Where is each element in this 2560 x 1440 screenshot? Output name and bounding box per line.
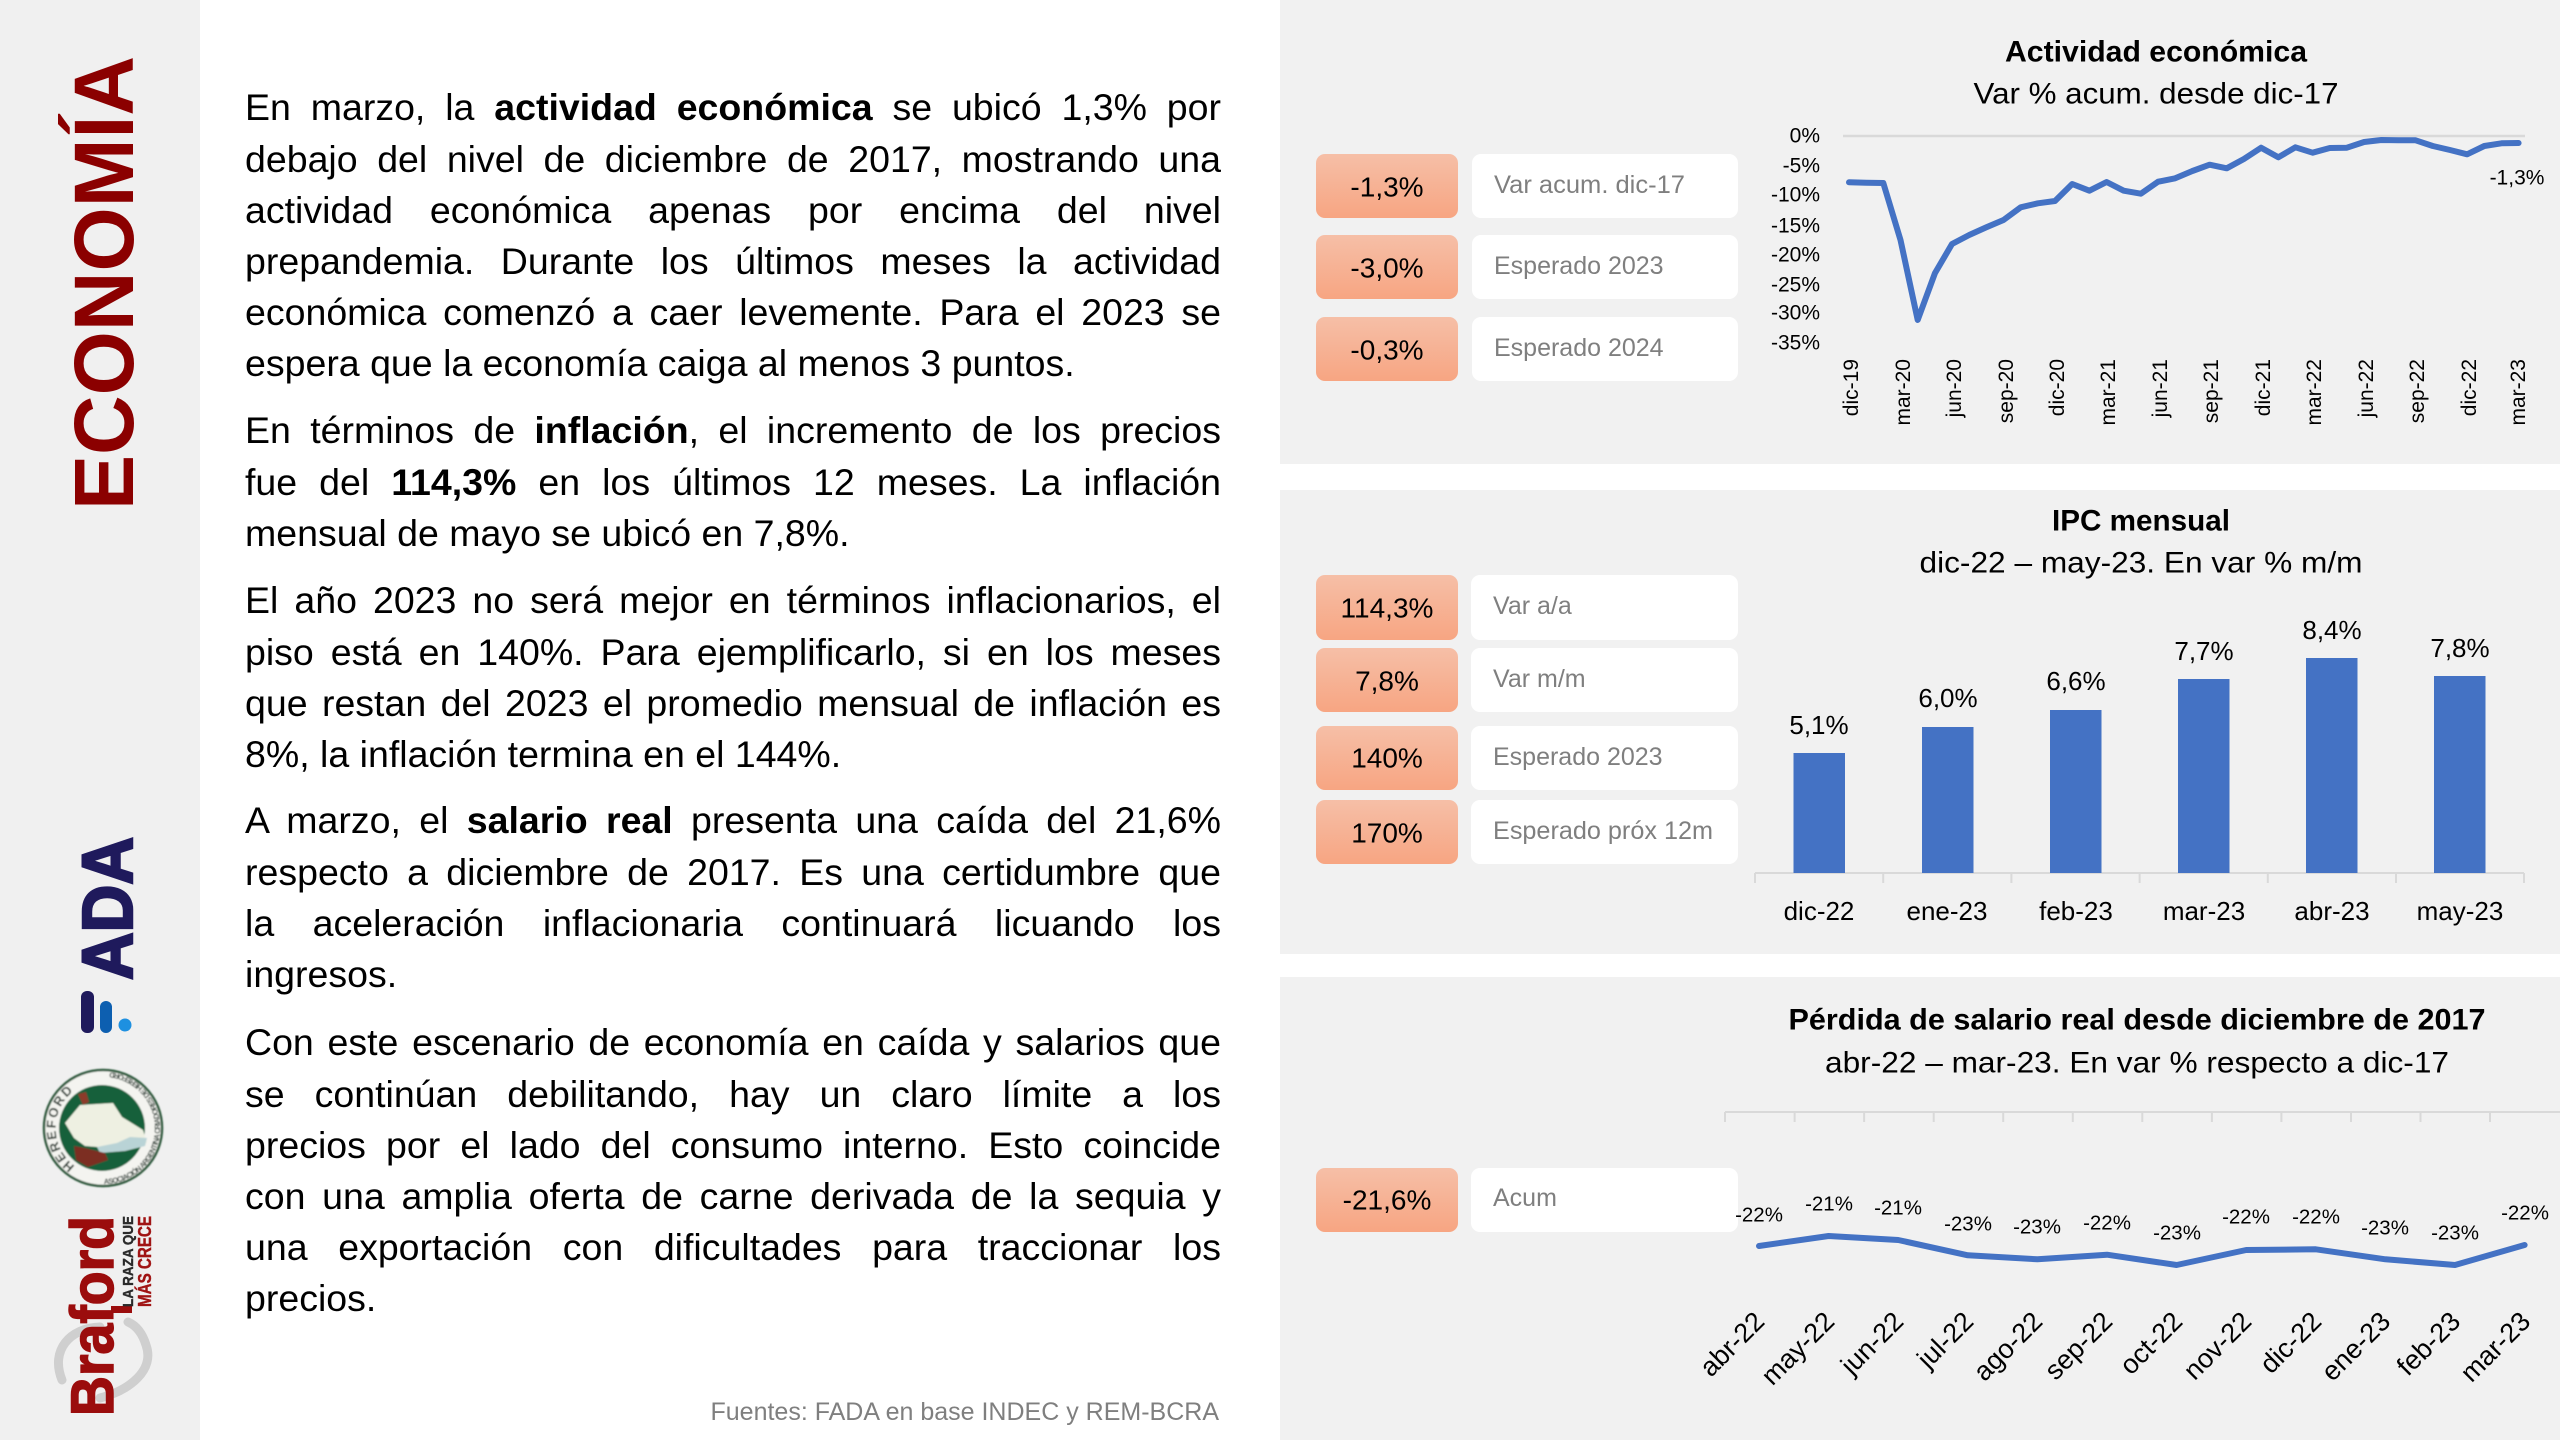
stat: -21,6% acum: Acum [1493, 1184, 1557, 1212]
line chart: actividad económica: 0% [1790, 124, 1820, 148]
line chart: salario real: ago-22 [1968, 1306, 2048, 1387]
stat: 114,3% var a/a: 114,3% [1341, 592, 1433, 624]
logo: Hereford seal: ASOCIACIÓN ARGENTINA CRIADORES DE HEREFORD [104, 1071, 162, 1185]
line chart: actividad económica: mar-22 [2303, 359, 2326, 426]
line chart: actividad económica [1771, 124, 2544, 426]
text block: actividad económica: En marzo, la actividad económica se ubicó 1,3% por [245, 86, 1221, 128]
logo: Braford: Braford [59, 1216, 126, 1416]
line chart: salario real: jun-22 [1834, 1306, 1909, 1381]
text block: inflación [245, 409, 1221, 554]
line chart: actividad económica: jun-20 [1943, 359, 1966, 418]
line chart: salario real: oct-22 [2114, 1306, 2188, 1380]
line chart: salario real: -22% [1735, 1204, 1783, 1226]
stat: 140% esperado 2023: Esperado 2023 [1493, 743, 1663, 771]
line chart: salario real: may-22 [1755, 1306, 1840, 1391]
text block: escenario: precios. [245, 1277, 376, 1319]
line chart: salario real: nov-22 [2178, 1306, 2257, 1386]
stat: 114,3% var a/a [1316, 575, 1738, 640]
line chart: salario real [1694, 1112, 2560, 1391]
bar chart: IPC mensual: ene-23 [1907, 896, 1987, 926]
logo: Hereford seal: HEREFORD [46, 1086, 75, 1173]
heading: actividad económica: Actividad económica [2005, 36, 2307, 68]
line chart: actividad económica: -30% [1771, 302, 1820, 324]
bar chart: IPC mensual: dic-22 [1784, 896, 1854, 926]
text block: salario real [245, 799, 1221, 995]
panel: left sidebar [0, 0, 200, 1440]
bar chart: IPC mensual: 7,7% [2174, 636, 2234, 666]
line chart: salario real: abr-22 [1694, 1306, 1770, 1382]
logo: FADA [69, 837, 148, 1033]
line chart: actividad económica: dic-19 [1840, 359, 1863, 416]
line chart: salario real: -23% [2013, 1216, 2061, 1238]
stat: -1,3% var acum [1316, 154, 1738, 218]
panel: actividad económica [1280, 0, 2560, 464]
logo: Hereford seal [42, 1068, 164, 1188]
bar chart: IPC mensual: 6,0% [1918, 683, 1978, 713]
logo: Braford [58, 1216, 155, 1416]
line chart: salario real: -23% [2431, 1222, 2479, 1244]
line chart: salario real: -23% [2153, 1222, 2201, 1244]
text block: 2023 inflacionario: El año 2023 no será mejor en términos inflacionarios, el [245, 579, 1221, 621]
line chart: salario real: -22% [2083, 1212, 2131, 1234]
text block: escenario [245, 1021, 1221, 1319]
text block: actividad económica [245, 86, 1221, 384]
line chart: salario real: mar-23 [2455, 1306, 2536, 1388]
line chart: salario real: ene-23 [2316, 1306, 2396, 1387]
stat: 7,8% var m/m: Var m/m [1493, 665, 1586, 693]
bar chart: IPC mensual: may-23 [2417, 896, 2503, 926]
heading: IPC mensual: IPC mensual [2052, 504, 2230, 538]
text block: escenario: Con este escenario de economía en caída y salarios que [245, 1021, 1221, 1063]
line chart: actividad económica: -20% [1771, 244, 1820, 266]
stat: 170% esperado próx 12m: 170% [1351, 818, 1423, 848]
line chart: actividad económica: -15% [1771, 214, 1820, 238]
stat: -0,3% esperado 2024 [1316, 317, 1738, 381]
stat: -0,3% esperado 2024: -0,3% [1350, 334, 1424, 366]
stat: -1,3% var acum: -1,3% [1350, 172, 1424, 202]
panel: IPC mensual [1280, 490, 2560, 954]
line chart: actividad económica: sep-21 [2200, 359, 2223, 423]
text block: 2023 inflacionario: 8%, la inflación termina en el 144%. [245, 733, 841, 775]
subheading: actividad económica: Var % acum. desde dic-17 [1974, 78, 2338, 110]
bar chart: IPC mensual: abr-23 [2294, 896, 2370, 926]
text block: inflación: En términos de inflación, el incremento de los precios [245, 409, 1221, 451]
text block: actividad económica: económica comenzó a caer levemente. Para el 2023 se [245, 291, 1221, 333]
stat: -21,6% acum [1316, 1168, 1738, 1232]
stat: -21,6% acum: -21,6% [1343, 1184, 1431, 1216]
stat: 114,3% var a/a: Var a/a [1493, 592, 1572, 620]
text block: inflación: mensual de mayo se ubicó en 7,8%. [245, 512, 850, 554]
logo: Braford: MÁS CRECE [134, 1216, 155, 1307]
text block: salario real: A marzo, el salario real presenta una caída del 21,6% [245, 799, 1221, 841]
stat: -3,0% esperado 2023: Esperado 2023 [1494, 252, 1664, 280]
line chart: actividad económica: dic-21 [2252, 359, 2275, 416]
heading: salario real: Pérdida de salario real desde diciembre de 2017 [1788, 1004, 2486, 1036]
line chart: actividad económica: -25% [1771, 274, 1820, 296]
stat: -0,3% esperado 2024: Esperado 2024 [1494, 334, 1664, 362]
line chart: salario real: -21% [1874, 1196, 1922, 1220]
panel: salario real [1280, 977, 2560, 1440]
text block: 2023 inflacionario [245, 579, 1221, 775]
text block: actividad económica: actividad económica apenas por encima del nivel [245, 189, 1221, 231]
text block: salario real: la aceleración inflacionaria continuará licuando los [245, 902, 1221, 944]
text block: actividad económica: prepandemia. Durante los últimos meses la actividad [245, 240, 1221, 282]
text block: escenario: precios por el lado del consumo interno. Esto coincide [245, 1124, 1221, 1166]
line chart: actividad económica: -5% [1783, 154, 1820, 178]
text block: salario real: respecto a diciembre de 2017. Es una certidumbre que [245, 851, 1221, 893]
line chart: salario real: -22% [2501, 1202, 2549, 1224]
line chart: actividad económica: sep-22 [2406, 359, 2429, 423]
stat: 7,8% var m/m: 7,8% [1355, 666, 1419, 696]
text block: salario real: ingresos. [245, 953, 397, 995]
line chart: salario real: -21% [1805, 1192, 1853, 1216]
stat: 170% esperado próx 12m [1316, 800, 1738, 864]
stat: 170% esperado próx 12m: Esperado próx 12m [1493, 817, 1713, 845]
text block: actividad económica: debajo del nivel de diciembre de 2017, mostrando una [245, 138, 1221, 180]
text block: escenario: se continúan debilitando, hay un claro límite a los [245, 1073, 1221, 1115]
line chart: salario real: -22% [2292, 1206, 2340, 1228]
bar chart: IPC mensual: 6,6% [2046, 666, 2106, 696]
line chart: salario real: -22% [2222, 1206, 2270, 1228]
line chart: actividad económica: -10% [1771, 184, 1820, 206]
line chart: actividad económica: -35% [1771, 332, 1820, 354]
subheading: salario real: abr-22 – mar-23. En var % respecto a dic-17 [1825, 1046, 2449, 1080]
text block: 2023 inflacionario: piso está en 140%. Para ejemplificarlo, si en los meses [245, 631, 1221, 673]
line chart: actividad económica: mar-21 [2097, 359, 2120, 426]
text block: actividad económica: espera que la economía caiga al menos 3 puntos. [245, 342, 1075, 384]
line chart: actividad económica: jun-21 [2149, 359, 2172, 418]
bar chart: IPC mensual: mar-23 [2163, 896, 2245, 926]
bar chart: IPC mensual: feb-23 [2039, 896, 2113, 926]
line chart: actividad económica: sep-20 [1995, 359, 2018, 423]
line chart: salario real: feb-23 [2391, 1306, 2466, 1381]
line chart: salario real: jul-22 [1911, 1306, 1979, 1375]
text block: escenario: una exportación con dificultades para traccionar los [245, 1226, 1221, 1268]
bar chart: IPC mensual: 5,1% [1789, 710, 1849, 740]
text block: inflación: fue del 114,3% en los últimos 12 meses. La inflación [245, 461, 1221, 503]
bar chart: IPC mensual: 8,4% [2302, 615, 2362, 645]
text block: 2023 inflacionario: que restan del 2023 el promedio mensual de inflación es [245, 682, 1221, 724]
line chart: salario real: sep-22 [2039, 1306, 2118, 1386]
stat: 7,8% var m/m [1316, 648, 1738, 712]
line chart: salario real: -23% [1944, 1212, 1992, 1236]
stat: -1,3% var acum: Var acum. dic-17 [1494, 171, 1685, 199]
bar chart: IPC mensual: 7,8% [2430, 633, 2490, 663]
stat: -3,0% esperado 2023: -3,0% [1350, 252, 1424, 284]
stat: 140% esperado 2023 [1316, 726, 1738, 790]
line chart: actividad económica: dic-22 [2458, 359, 2481, 416]
line chart: salario real: -23% [2361, 1216, 2409, 1240]
logo: FADA: ADA [69, 837, 148, 980]
bar chart: IPC mensual [1755, 615, 2524, 926]
line chart: actividad económica: mar-23 [2507, 359, 2530, 426]
text block: escenario: con una amplia oferta de carne derivada de la sequia y [245, 1175, 1221, 1217]
stat: -3,0% esperado 2023 [1316, 235, 1738, 299]
line chart: salario real: dic-22 [2254, 1306, 2327, 1379]
line chart: actividad económica: mar-20 [1892, 359, 1915, 426]
heading: ECONOMÍA: ECONOMÍA [57, 56, 151, 510]
line chart: actividad económica: dic-20 [2046, 359, 2069, 416]
line chart: actividad económica: -1,3% [2490, 166, 2544, 190]
stat: 140% esperado 2023: 140% [1351, 742, 1423, 774]
source note: Fuentes: FADA en base INDEC y REM-BCRA [710, 1398, 1219, 1426]
line chart: actividad económica: jun-22 [2355, 359, 2378, 418]
subheading: IPC mensual: dic-22 – may-23. En var % m/m [1920, 546, 2362, 580]
logo: Braford: LA RAZA QUE [120, 1216, 137, 1307]
